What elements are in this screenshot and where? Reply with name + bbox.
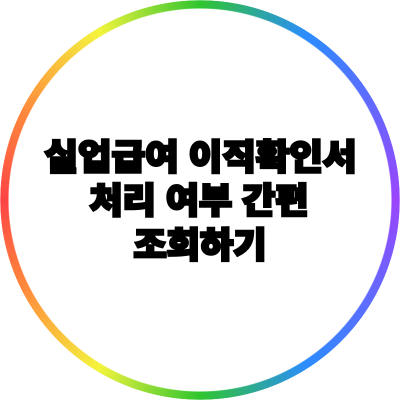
title: 조회하기: [134, 226, 266, 266]
title: 실업급여 이직확인서: [44, 138, 356, 178]
title: 처리 여부 간편: [90, 182, 308, 221]
